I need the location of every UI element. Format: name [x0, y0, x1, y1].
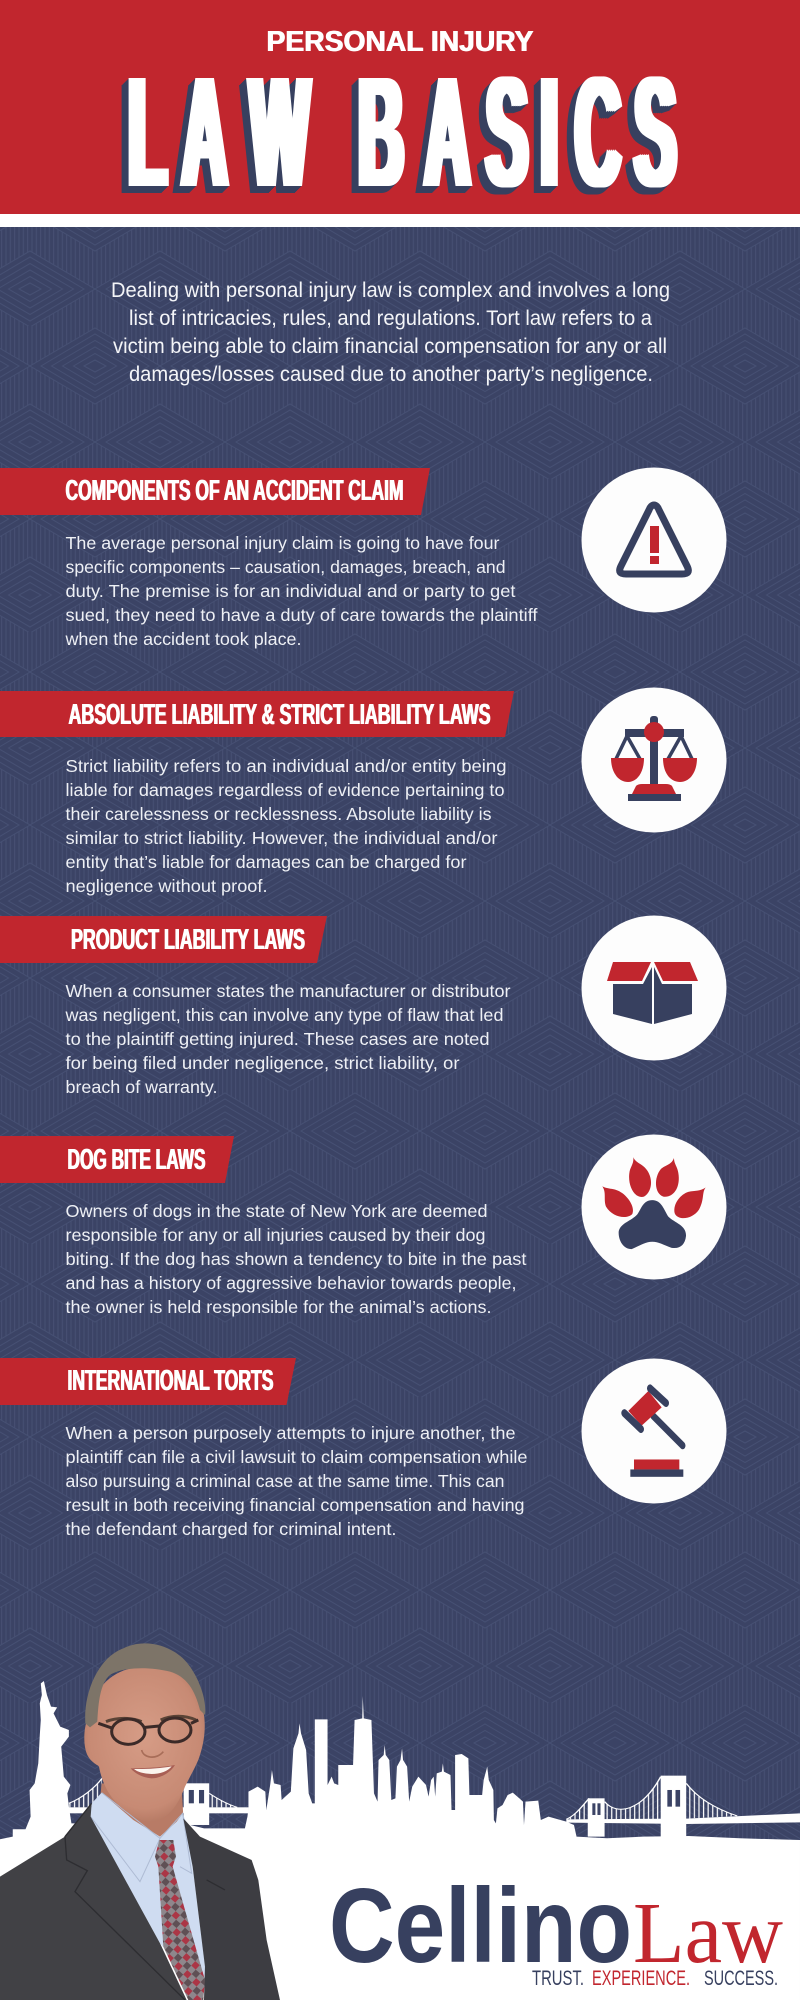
title: personal injury: PERSONAL INJURY	[266, 26, 533, 58]
body text: components: sued, they need to have a duty of care towards the plaintiff	[66, 605, 538, 625]
icon: gavel	[582, 1358, 726, 1504]
heading: absolute liability: ABSOLUTE LIABILITY & STRICT LIABILITY LAWS	[68, 699, 490, 731]
icon: open box	[582, 916, 726, 1060]
banner: dog bite	[0, 1136, 234, 1183]
body text: international torts: When a person purposely attempts to injure another, the	[66, 1423, 516, 1443]
panel: dog bite laws	[0, 1134, 726, 1317]
body text: components: The average personal injury claim is going to have four	[66, 533, 500, 553]
body text: international torts	[66, 1423, 528, 1539]
body text: international torts: result in both receiving financial compensation and having	[66, 1495, 524, 1515]
body text: product liability: to the plaintiff getting injured. These cases are noted	[66, 1029, 490, 1049]
body text: absolute liability	[66, 756, 506, 896]
body text: components: duty. The premise is for an individual and or party to get	[66, 581, 516, 601]
heading: dog bite: DOG BITE LAWS	[67, 1144, 205, 1176]
title: law basics: LAW BASICS	[124, 46, 672, 220]
panel: absolute and strict liability	[0, 688, 726, 896]
body text: dog bite: the owner is held responsible for the animal’s actions.	[66, 1297, 492, 1317]
shirt	[90, 1793, 206, 1993]
icon: paw print	[582, 1134, 726, 1280]
body text: dog bite: biting. If the dog has shown a tendency to bite in the past	[66, 1249, 527, 1269]
body text: dog bite: Owners of dogs in the state of New York are deemed	[66, 1201, 488, 1221]
body text: international torts: the defendant charged for criminal intent.	[66, 1519, 396, 1539]
bridge: left	[69, 1778, 248, 1825]
intro text	[111, 278, 670, 386]
intro text: Dealing with personal injury law is complex and involves a long	[111, 278, 670, 302]
body text: components: when the accident took place.	[64, 629, 302, 649]
logo: cellino law: Law	[633, 1884, 783, 1981]
tie	[155, 1840, 205, 2000]
intro text: list of intricacies, rules, and regulations. Tort law refers to a	[129, 306, 652, 330]
logo: cellino law: Cellino	[329, 1867, 632, 1985]
body text: international torts: also pursuing a criminal case at the same time. This can	[66, 1471, 504, 1491]
body text: product liability: breach of warranty.	[66, 1077, 218, 1097]
banner: international torts	[0, 1358, 296, 1405]
body text: absolute liability: their carelessness or recklessness. Absolute liability is	[66, 804, 492, 824]
intro text: damages/losses caused due to another party’s negligence.	[129, 362, 653, 386]
new york skyline with bridges	[0, 1681, 800, 2000]
header band	[0, 0, 800, 227]
glasses	[98, 1718, 198, 1744]
tagline: TRUST.	[532, 1967, 584, 1990]
eyebrows	[106, 1716, 196, 1722]
body text: product liability: for being filed under negligence, strict liability, or	[66, 1053, 460, 1073]
nose and smile	[142, 1750, 163, 1757]
body text: absolute liability: entity that’s liable for damages can be charged for	[66, 852, 467, 872]
hair	[85, 1643, 205, 1727]
tagline: EXPERIENCE.	[592, 1967, 690, 1990]
body text: product liability: When a consumer states the manufacturer or distributor	[66, 981, 511, 1001]
panel: international torts	[0, 1358, 726, 1539]
icon: scales of justice	[582, 688, 726, 832]
icon: warning triangle	[582, 468, 726, 612]
body text: dog bite: responsible for any or all injuries caused by their dog	[66, 1225, 486, 1245]
body text: absolute liability: liable for damages regardless of evidence pertaining to	[66, 780, 504, 800]
panel: product liability	[0, 916, 726, 1097]
body text: dog bite	[66, 1201, 527, 1317]
body text: absolute liability: similar to strict liability. However, the individual and/or	[66, 828, 498, 848]
body text: international torts: plaintiff can file a civil lawsuit to claim compensation while	[66, 1447, 528, 1467]
head	[84, 1667, 205, 1822]
body text: absolute liability: negligence without proof.	[66, 876, 268, 896]
body text: components	[64, 533, 538, 649]
portrait: attorney in suit	[0, 1643, 280, 2000]
body text: components: specific components – causation, damages, breach, and	[66, 557, 505, 577]
body text: absolute liability: Strict liability refers to an individual and/or entity being	[66, 756, 506, 776]
body text: product liability: was negligent, this can involve any type of flaw that led	[64, 1005, 503, 1025]
suit jacket	[0, 1803, 187, 2000]
banner: components	[0, 468, 430, 515]
heading: product liability: PRODUCT LIABILITY LAWS	[70, 924, 304, 956]
bridge: right	[566, 1776, 800, 1837]
neck	[100, 1783, 183, 1840]
body text: product liability	[64, 981, 511, 1097]
heading: components: COMPONENTS OF AN ACCIDENT CLAIM	[65, 475, 403, 507]
body text: dog bite: and has a history of aggressive behavior towards people,	[66, 1273, 516, 1293]
banner: product liability	[0, 916, 327, 963]
panel: components of an accident claim	[0, 468, 726, 649]
banner: absolute liability	[0, 691, 514, 737]
tagline	[532, 1967, 778, 1990]
heading: international torts: INTERNATIONAL TORTS	[67, 1365, 273, 1397]
intro text: victim being able to claim financial compensation for any or all	[113, 334, 667, 358]
